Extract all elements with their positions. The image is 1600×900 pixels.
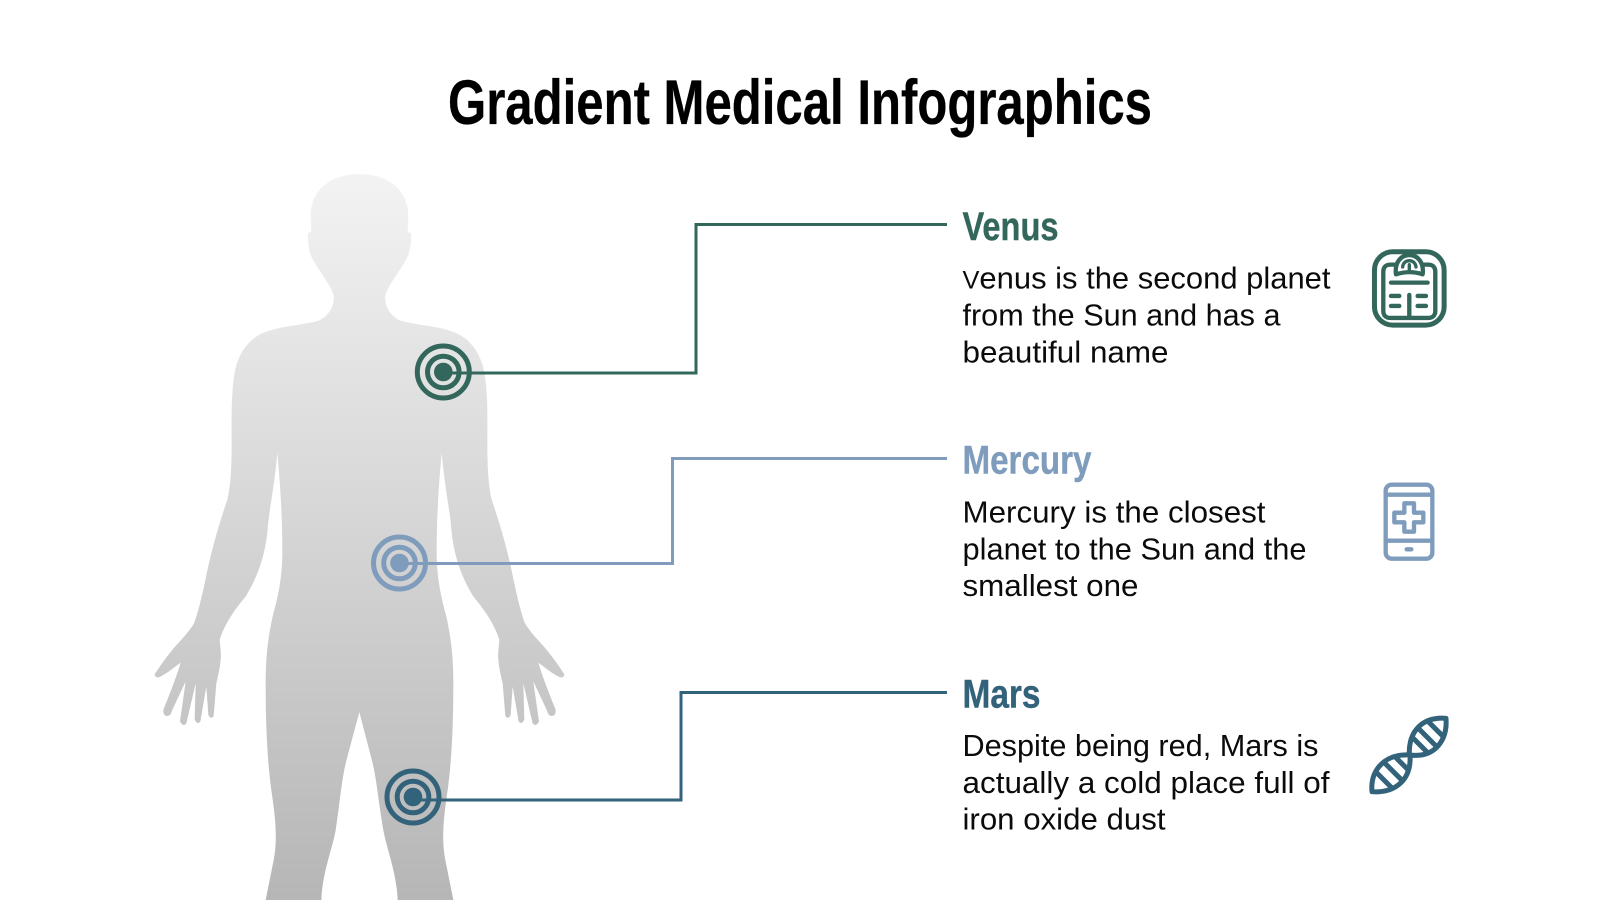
target marker: Venus — [417, 346, 469, 398]
target marker: Mercury — [374, 537, 426, 589]
text: Mercury description: planet to the Sun and the — [962, 532, 1306, 566]
text: Venus description: beautiful name — [962, 335, 1168, 369]
text: Mars description: actually a cold place full of — [962, 766, 1330, 800]
panel: Mercury — [374, 438, 1432, 603]
target marker: Mars — [387, 771, 439, 823]
heading: Mercury: Mercury — [962, 438, 1092, 482]
panel: Venus — [417, 205, 1444, 398]
text: Mercury description: smallest one — [962, 569, 1138, 603]
text: Venus description: Venus is the second planet — [962, 262, 1331, 296]
text: Venus description: from the Sun and has a — [962, 299, 1281, 333]
panel: Mars — [387, 672, 1450, 837]
connector line: Venus — [443, 224, 947, 373]
icon: weighing scale — [1374, 252, 1444, 325]
heading: Mars: Mars — [962, 672, 1040, 716]
title: Gradient Medical Infographics — [448, 68, 1152, 138]
human body silhouette — [155, 174, 564, 900]
text: Mars description — [962, 729, 1330, 837]
text: Mars description: iron oxide dust — [962, 803, 1166, 837]
text: Mercury description: Mercury is the closest — [962, 495, 1266, 529]
text: Mercury description — [962, 495, 1306, 603]
connector line: Mars — [413, 692, 947, 800]
connector line: Mercury — [399, 458, 947, 564]
heading: Venus: Venus — [962, 205, 1058, 249]
icon: medical phone — [1386, 485, 1432, 559]
text: Venus description — [962, 262, 1331, 369]
text: Mars description: Despite being red, Mars is — [962, 729, 1318, 763]
icon: DNA helix — [1372, 713, 1450, 792]
